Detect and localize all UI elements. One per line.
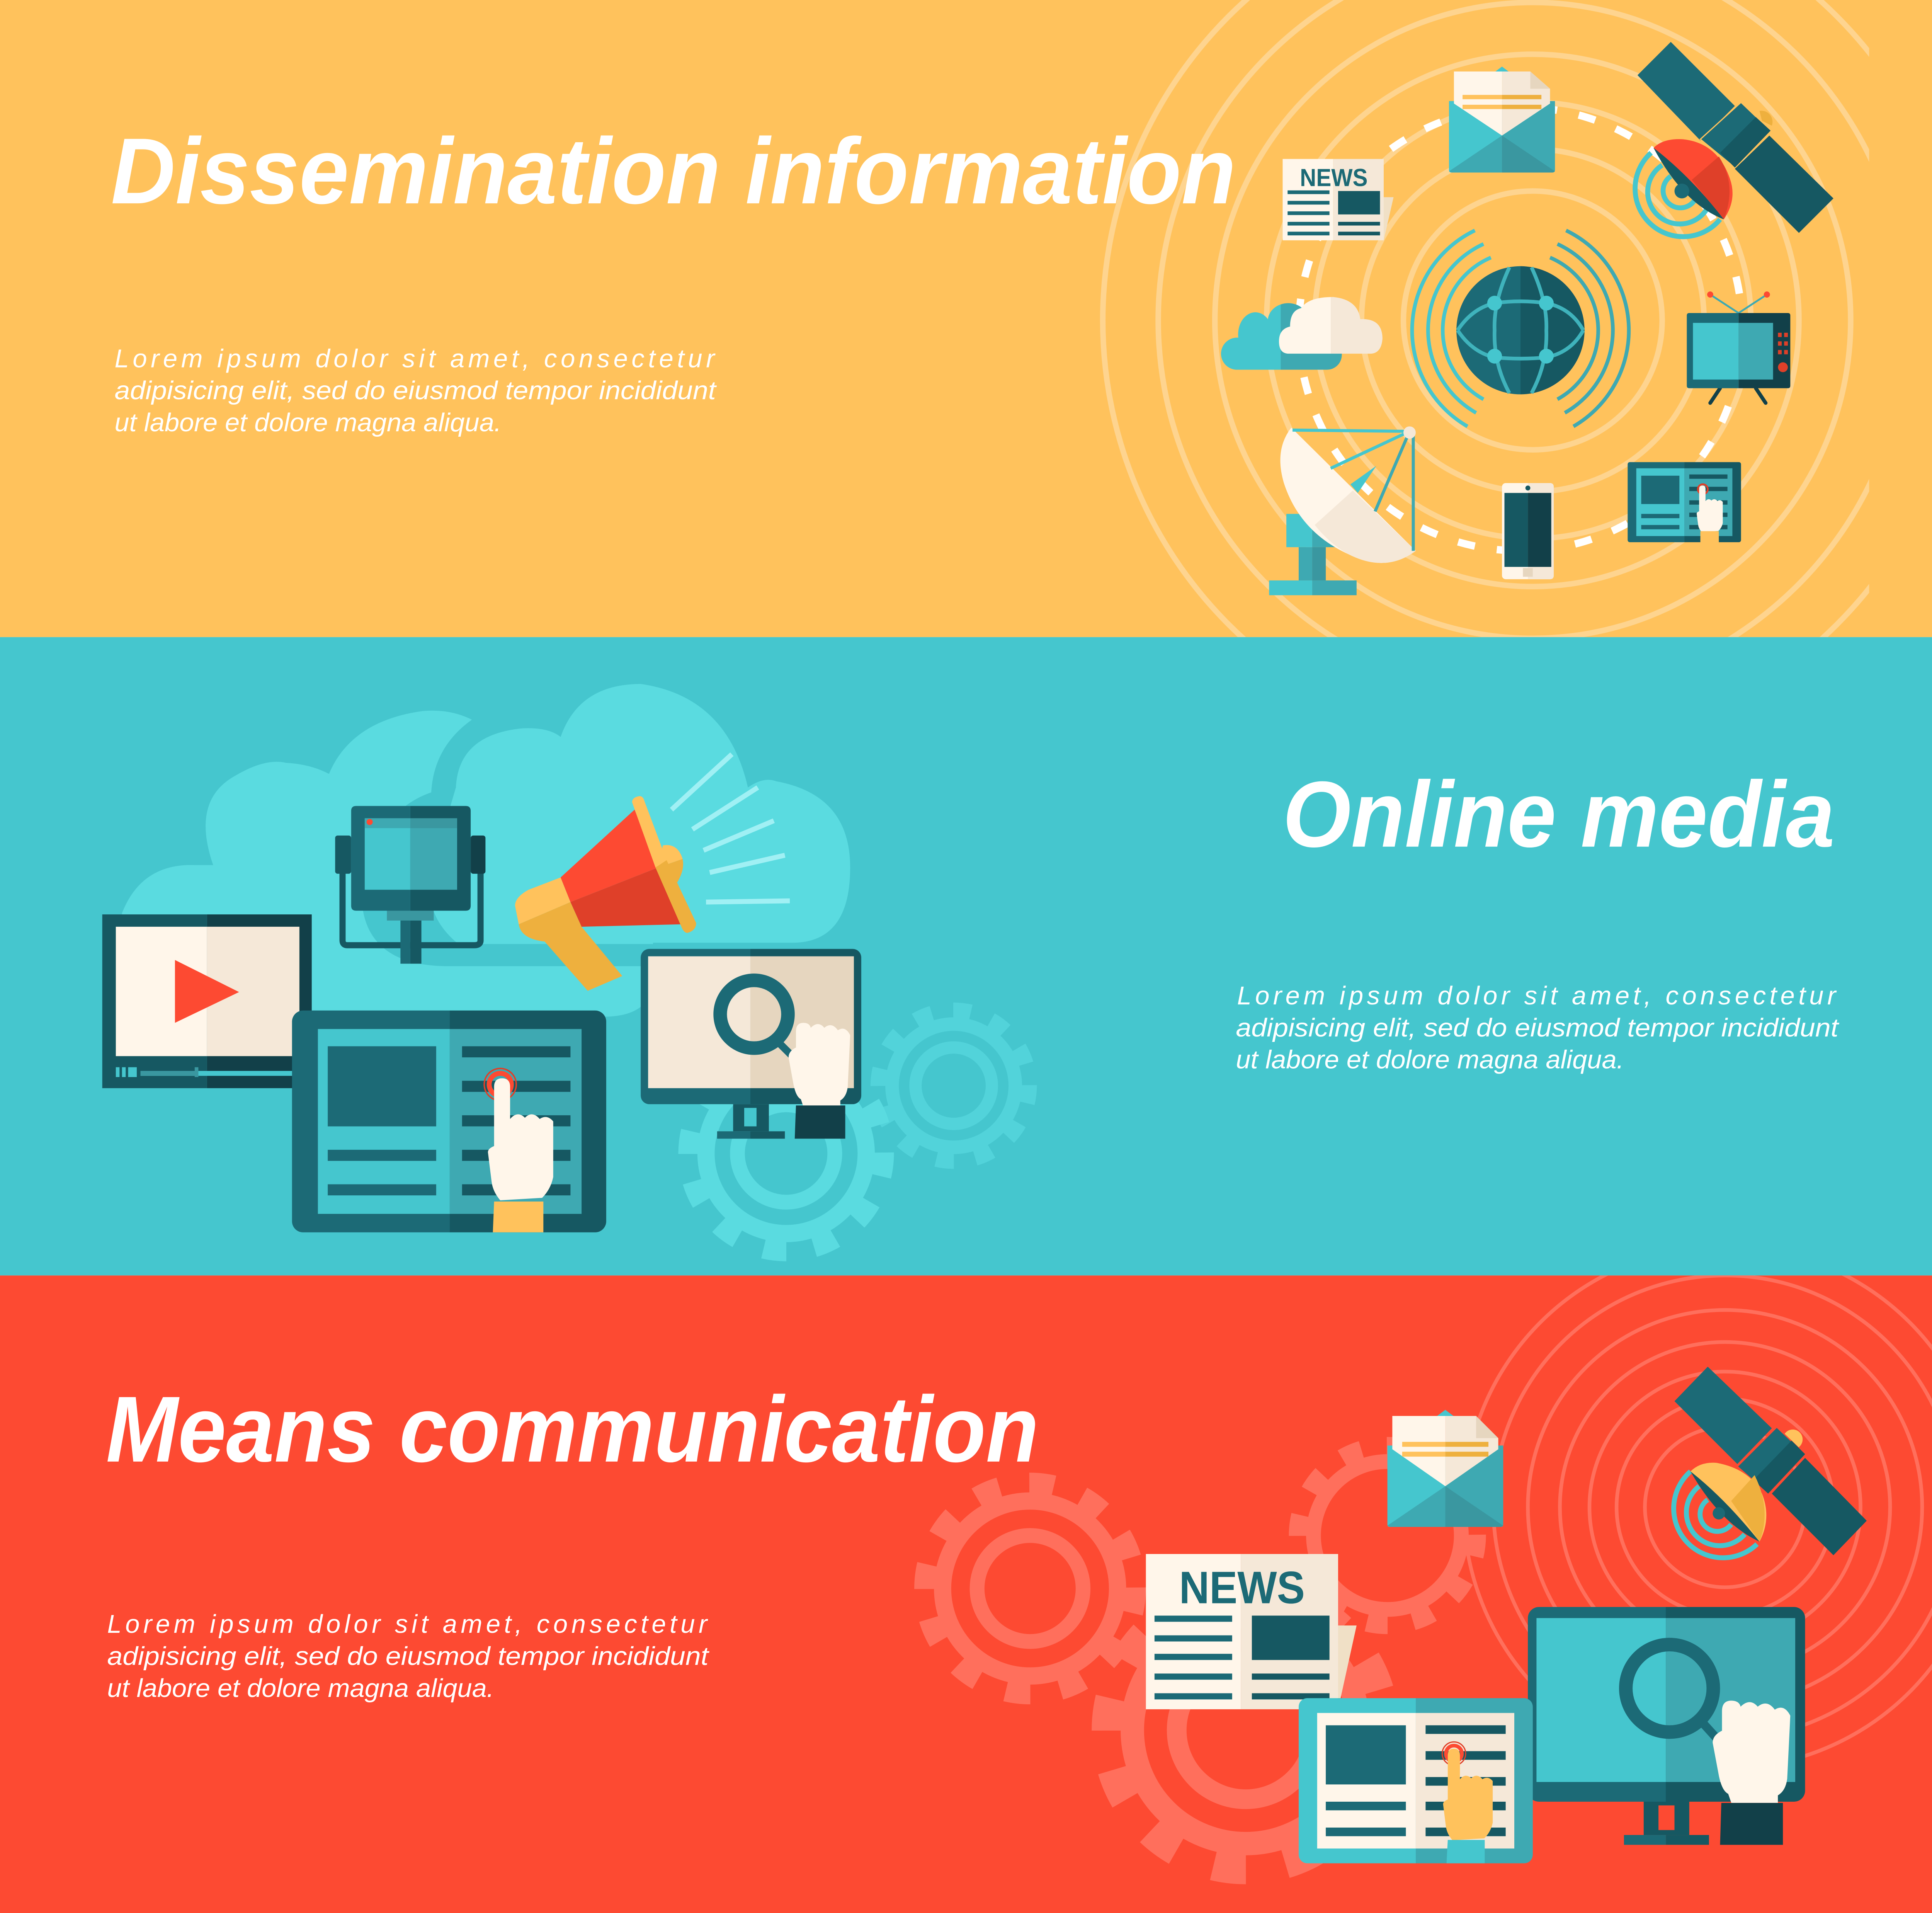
icon: television	[1687, 291, 1790, 403]
icon: mounted device	[335, 806, 485, 964]
body text: adipisicing elit, sed do eiusmod tempor incididunt	[107, 1642, 709, 1671]
icon: touch tablet	[292, 1011, 606, 1232]
cloud overlap band	[362, 703, 673, 966]
icon: monitor with magnifier	[641, 949, 861, 1139]
icon: globe with waves	[1412, 230, 1629, 426]
panel: means communication	[0, 1246, 1932, 1913]
heading: Means communication	[106, 1377, 1039, 1482]
body text: ut labore et dolore magna aliqua.	[1236, 1045, 1624, 1074]
dashed orbit	[1299, 107, 1742, 551]
body text	[115, 344, 717, 437]
concentric signal rings	[1464, 1246, 1932, 1768]
body text	[1236, 981, 1839, 1074]
icon: smartphone	[1502, 483, 1554, 579]
gear large	[1107, 1591, 1385, 1869]
gear upper	[1299, 1447, 1476, 1624]
icon: clouds	[1221, 297, 1383, 370]
icon: megaphone	[515, 796, 696, 991]
body text: ut labore et dolore magna aliqua.	[107, 1674, 494, 1703]
body text: adipisicing elit, sed do eiusmod tempor incididunt	[115, 376, 717, 405]
concentric signal rings	[1100, 0, 1869, 637]
gear small	[879, 1011, 1029, 1161]
icon: newspaper	[1283, 159, 1394, 240]
panel: dissemination information	[0, 0, 1932, 637]
icon: newspaper: NEWS	[1179, 1562, 1305, 1613]
gear large	[689, 1056, 883, 1251]
icon: video player	[102, 914, 312, 1088]
icon: envelope	[1449, 66, 1555, 172]
background cloud	[119, 684, 850, 1017]
body text: Lorem ipsum dolor sit amet, consectetur	[115, 344, 716, 373]
body text	[107, 1610, 709, 1703]
icon: newspaper: NEWS	[1300, 164, 1368, 192]
heading: Dissemination information	[111, 119, 1236, 223]
icon: envelope	[1388, 1410, 1503, 1527]
icon: satellite	[1674, 1367, 1867, 1558]
body text: Lorem ipsum dolor sit amet, consectetur	[1237, 981, 1837, 1010]
panel: online media	[0, 637, 1932, 1275]
icon: touch tablet	[1299, 1698, 1533, 1863]
icon: satellite dish	[1269, 426, 1416, 595]
body text: ut labore et dolore magna aliqua.	[115, 408, 502, 437]
icon: touch tablet	[1628, 462, 1741, 542]
icon: newspaper	[1146, 1554, 1357, 1709]
heading: Online media	[1283, 762, 1835, 867]
body text: Lorem ipsum dolor sit amet, consectetur	[107, 1610, 708, 1639]
gear left	[925, 1484, 1135, 1693]
icon: monitor with magnifier	[1528, 1607, 1805, 1845]
body text: adipisicing elit, sed do eiusmod tempor incididunt	[1236, 1013, 1839, 1042]
icon: satellite	[1635, 42, 1833, 237]
light rays	[672, 754, 790, 902]
